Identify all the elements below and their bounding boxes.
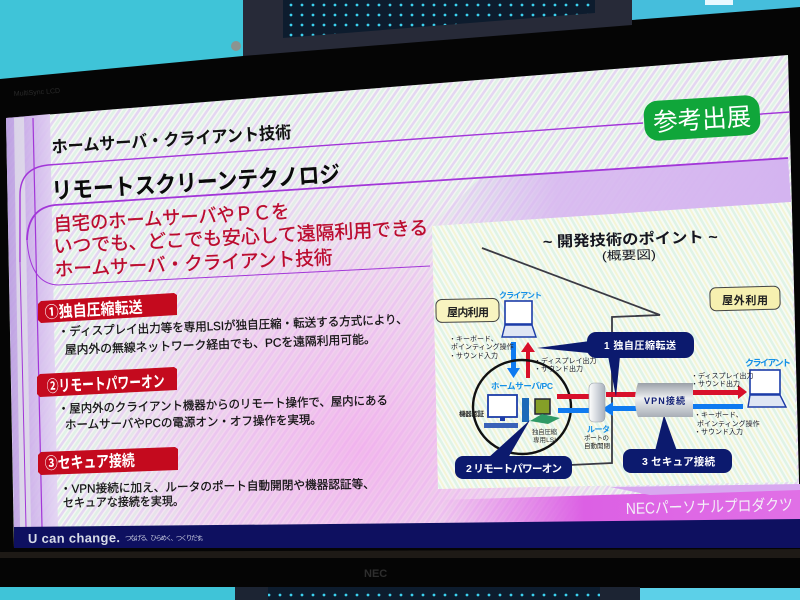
indoor input text: ・サウンド入力 bbox=[449, 351, 498, 360]
label: LSI bbox=[532, 427, 558, 444]
diagram subtitle: (概要図) bbox=[602, 248, 656, 263]
badge: 参考出展 bbox=[643, 94, 761, 142]
red and blue data lines bbox=[557, 392, 637, 416]
indoor input text: ・キーボード、 bbox=[449, 335, 498, 343]
left margin stripes bbox=[6, 114, 58, 527]
footer band bbox=[14, 519, 800, 548]
item 3 bbox=[38, 447, 375, 510]
indoor input text: ポインティング操作 bbox=[451, 342, 514, 351]
monitor bezel text: MultiSync LCD bbox=[14, 88, 60, 98]
item 1: ・ディスプレイ出力等を専用LSIが独自圧縮・転送する方式により、 bbox=[58, 311, 408, 339]
indoor label bbox=[436, 298, 499, 323]
item 3: ・VPN接続に加え、ルータのポート自動開閉や機器認証等、 bbox=[60, 476, 375, 496]
item 3: ③セキュア接続 bbox=[45, 452, 135, 473]
item 1: 屋内外の無線ネットワーク経由でも、PCを遠隔利用可能。 bbox=[65, 331, 376, 357]
indoor output text: ・サウンド出力 bbox=[534, 364, 583, 373]
red lead text: ホームサーバ・クライアント技術 bbox=[54, 247, 333, 281]
heading rules bbox=[20, 112, 790, 527]
outdoor output text: ・サウンド出力 bbox=[691, 379, 740, 388]
lavender band right of subtitle bbox=[430, 158, 791, 227]
red lead text bbox=[53, 201, 429, 281]
arrow: blue down bbox=[507, 342, 520, 378]
item 2 bbox=[37, 367, 388, 432]
client laptop indoor bbox=[499, 290, 542, 337]
footer band: つなげる、ひらめく、つくりだす。 bbox=[125, 533, 207, 542]
outdoor label: 屋外利用 bbox=[722, 293, 768, 307]
NEC logo: NEC bbox=[364, 568, 387, 580]
line: blue outdoor bbox=[693, 404, 743, 409]
outdoor input text: ・サウンド入力 bbox=[694, 427, 743, 436]
item 2: ・屋内外のクライアント機器からのリモート操作で、屋内にある bbox=[58, 392, 388, 416]
house outline bbox=[482, 248, 660, 465]
outdoor input text bbox=[694, 411, 760, 436]
outdoor label bbox=[710, 286, 780, 311]
item 1 bbox=[38, 293, 408, 357]
callout 3 bbox=[623, 415, 732, 473]
router bbox=[584, 383, 610, 450]
circle: home server bbox=[473, 360, 571, 454]
item 2: ②リモートパワーオン bbox=[46, 373, 165, 396]
outdoor output text: ・ディスプレイ出力 bbox=[691, 371, 754, 380]
callout 2: 2 リモートパワーオン bbox=[466, 463, 562, 475]
left margin pale strip bbox=[14, 117, 31, 527]
indoor output text bbox=[534, 356, 597, 373]
main title: リモートスクリーンテクノロジ bbox=[51, 161, 341, 204]
footer band: U can change. bbox=[28, 530, 120, 546]
VPN tunnel bbox=[635, 383, 693, 417]
callout 2 bbox=[455, 420, 572, 479]
label: home server: ホームサーバ/PC bbox=[491, 381, 553, 391]
callout 1: 1 独自圧縮転送 bbox=[604, 339, 676, 352]
indoor input text bbox=[449, 335, 514, 360]
router: 自動開閉 bbox=[584, 441, 610, 450]
router: ルータ bbox=[587, 424, 610, 434]
red lead text: いつでも、どこでも安心して遠隔利用できる bbox=[53, 217, 429, 258]
outdoor output text bbox=[691, 371, 754, 388]
diagram title: ~ 開発技術のポイント ~ bbox=[543, 228, 718, 251]
item 3: セキュアな接続を実現。 bbox=[63, 493, 184, 510]
router: ポートの bbox=[584, 434, 609, 442]
client laptop indoor: クライアント bbox=[499, 290, 542, 300]
arrow: red up bbox=[521, 342, 535, 378]
pink company strip bbox=[440, 484, 800, 523]
red lead text: 自宅のホームサーバやＰＣを bbox=[53, 201, 290, 236]
client laptop outdoor: クライアント bbox=[745, 358, 791, 368]
panel: technology diagram bbox=[432, 202, 797, 489]
item 1: ①独自圧縮転送 bbox=[44, 298, 143, 322]
callout 3: 3 セキュア接続 bbox=[642, 455, 716, 468]
label: LSI: 独自圧縮 bbox=[532, 427, 558, 436]
section heading: ホームサーバ・クライアント技術 bbox=[51, 123, 292, 157]
callout 1 bbox=[537, 332, 694, 397]
VPN tunnel: VPN接続 bbox=[644, 395, 685, 406]
item 2: ホームサーバやPCの電源オン・オフ操作を実現。 bbox=[65, 412, 322, 432]
icon: desktop PC bbox=[484, 395, 560, 428]
indoor label: 屋内利用 bbox=[447, 305, 489, 319]
badge: 参考出展: 参考出展 bbox=[652, 103, 752, 137]
arrow: red outdoor bbox=[693, 385, 747, 399]
client laptop outdoor bbox=[745, 358, 791, 407]
label: authentication: 機器認証 bbox=[459, 409, 484, 418]
indoor output text: ・ディスプレイ出力 bbox=[534, 356, 597, 365]
outdoor input text: ・キーボード、 bbox=[694, 411, 743, 419]
outdoor input text: ポインティング操作 bbox=[697, 419, 760, 428]
label: LSI: 専用LSI bbox=[533, 435, 556, 444]
